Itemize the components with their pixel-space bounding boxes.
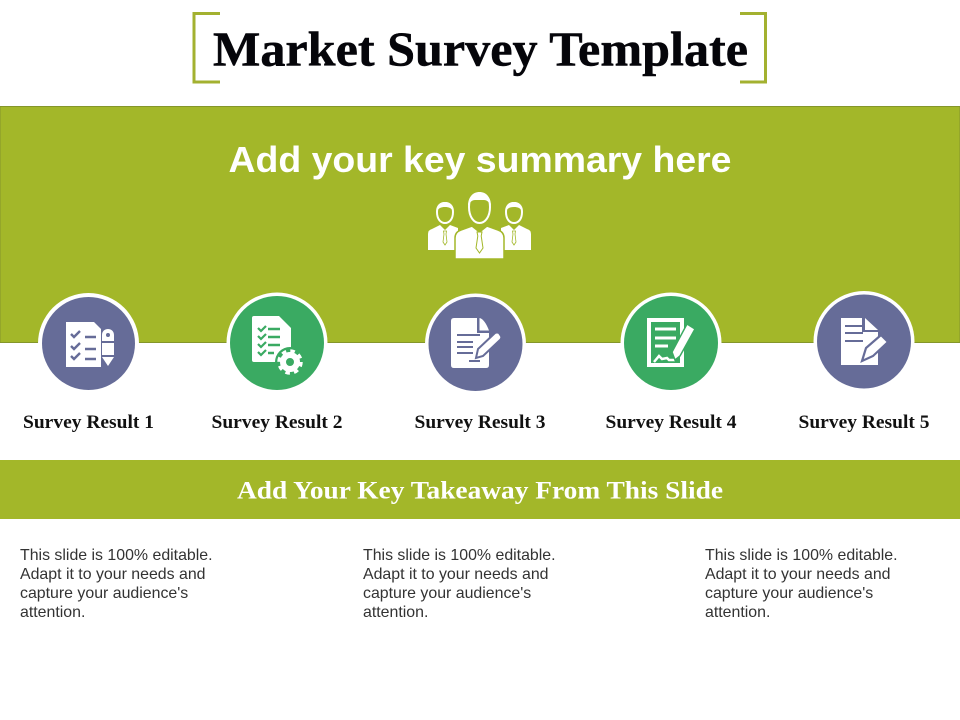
panel: green summary band bbox=[0, 106, 960, 342]
labels: survey results: Survey Result 2 bbox=[212, 412, 342, 433]
heading: takeaway: Add Your Key Takeaway From This Slide bbox=[237, 478, 723, 504]
labels: survey results: Survey Result 4 bbox=[606, 412, 737, 433]
text block 2: Adapt it to your needs and bbox=[363, 566, 549, 583]
labels: survey results: Survey Result 5 bbox=[798, 412, 930, 433]
labels: survey results: Survey Result 1 bbox=[23, 412, 154, 433]
text block 2: This slide is 100% editable. bbox=[363, 547, 556, 564]
panel: takeaway band bbox=[0, 460, 960, 519]
text block 1: attention. bbox=[20, 604, 85, 621]
circle icon 2: checklist and gear bbox=[226, 292, 328, 394]
text block 1: Adapt it to your needs and bbox=[20, 566, 206, 583]
text block 1: capture your audience's bbox=[20, 585, 188, 602]
text block 1: This slide is 100% editable. bbox=[20, 547, 213, 564]
text block 2: capture your audience's bbox=[363, 585, 531, 602]
text block 2: attention. bbox=[363, 604, 428, 621]
text block 3: Adapt it to your needs and bbox=[705, 566, 891, 583]
text block 3: capture your audience's bbox=[705, 585, 873, 602]
circle icon 5: document and pencil bbox=[814, 291, 914, 392]
heading: key summary: Add your key summary here bbox=[228, 139, 732, 180]
labels: survey results: Survey Result 3 bbox=[414, 412, 546, 433]
title with brackets: Market Survey Template bbox=[213, 22, 748, 76]
icon: business people bbox=[428, 192, 531, 259]
circle icon 3: document and pen bbox=[425, 294, 526, 394]
text block 3: This slide is 100% editable. bbox=[705, 547, 898, 564]
labels: survey results bbox=[23, 412, 930, 433]
circle icon 1: checklist and pencil bbox=[38, 293, 139, 394]
text block 3: attention. bbox=[705, 604, 770, 621]
circle icon 4: signed document and pen bbox=[620, 292, 722, 394]
